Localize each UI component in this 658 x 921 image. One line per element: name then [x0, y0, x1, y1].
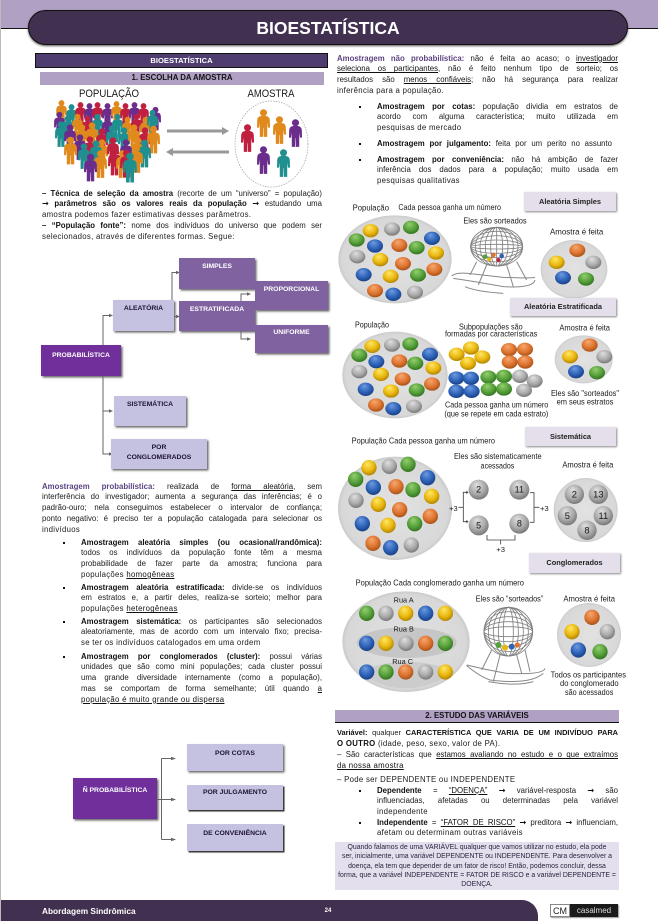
- bullet: aleatória simples: probabilidade de fazer parte da amostra; funciona para: [81, 559, 322, 568]
- logo: casalmed: casalmed: [577, 906, 611, 915]
- panel: sistemática: Amostra é feita: [562, 460, 614, 470]
- box: probabilística: [41, 345, 121, 376]
- panel: aleatória estratificada: Subpopulações são: [459, 321, 523, 331]
- text block: técnica de seleção: → parâmetros são os valores reais da população → estudando uma: [42, 199, 322, 208]
- box: por julgamento: [187, 785, 283, 810]
- callout: variável dependente e independente: Quando falamos de uma VARIÁVEL qualquer que vamos utilizar no estudo, ela pode: [348, 844, 606, 851]
- bullet: aleatória estratificada: Amostragem aleatória estratificada: divide-se os indivíduos: [81, 583, 322, 592]
- box: uniforme: UNIFORME: [273, 329, 310, 336]
- text block: técnica de seleção: – “População fonte”: nome dos indivíduos do universo que podem ser: [42, 221, 322, 230]
- bullet: sistemática: se ter os indivíduos catalogados em uma ordem: [81, 638, 260, 647]
- panel: aleatória simples: População: [353, 202, 389, 212]
- bullet: dependente: Dependente = “DOENÇA” → variável-resposta → são: [377, 786, 618, 795]
- connector arrows: [102, 270, 251, 456]
- section heading: bioestatística: [35, 53, 328, 68]
- bullet: aleatória estratificada: populações heterogêneas: [81, 604, 178, 613]
- text block: amostragem probabilística: interferência do investigador; aumenta a segurança das inferências; é o: [42, 492, 322, 501]
- tag: conglomerados: Conglomerados: [546, 558, 603, 567]
- panel: sistemática: 5: [476, 520, 481, 530]
- panel: sistemática: +3: [449, 504, 458, 513]
- text block: amostragem não probabilística: inferência para a população.: [337, 86, 444, 95]
- header band: [1, 0, 658, 29]
- bullet: por conveniência: Amostragem por conveniência: não há ambição de fazer: [377, 155, 618, 164]
- bullet: por cotas: Amostragem por cotas: população dividia em estratos de: [377, 102, 618, 111]
- bullet: independente: [377, 818, 618, 839]
- connector arrows: [157, 756, 176, 842]
- text block: amostragem probabilística: ponto negativo: é preciso ter a população catalogada para selecionar os: [42, 514, 322, 523]
- illustration: população e amostra: AMOSTRA: [248, 88, 295, 100]
- box: estratificada: ESTRATIFICADA: [190, 306, 244, 313]
- callout: variável dependente e independente: forma, que a variável INDEPENDENTE = FATOR DE RISCO e a variável DEPENDENTE =: [338, 872, 616, 879]
- bullet: por cotas: pesquisas de mercado: [377, 123, 461, 132]
- panel: sistemática: 11: [598, 511, 608, 521]
- bullet: independente: afetam ou determinam outras variáveis: [377, 828, 523, 837]
- bullet: conglomerados: mas se comportam de forma semelhante; útil quando a: [81, 684, 322, 693]
- panel: aleatória estratificada: [342, 320, 619, 419]
- page left edge: [0, 0, 1, 921]
- text block: variável: O OUTRO (idade, peso, sexo, valor de PA).: [337, 739, 500, 748]
- text block: variável: da nossa amostra: [337, 761, 404, 770]
- heading: estudo das variáveis: 2. ESTUDO DAS VARIÁVEIS: [425, 711, 529, 720]
- bullet: aleatória estratificada: [81, 583, 322, 615]
- tag: sistemática: Sistemática: [550, 432, 591, 441]
- bullet: independente: Independente = “FATOR DE RISCO” → preditora → influenciam,: [377, 818, 618, 827]
- heading: estudo das variáveis: [335, 710, 619, 723]
- bullet: dependente: influenciadas, afetadas ou determinadas pela variável: [377, 796, 618, 805]
- flowchart: amostragem probabilística: [41, 258, 331, 472]
- text block: amostragem não probabilística: Amostragem não probabilística: não é feita ao acaso; o investigador: [337, 54, 618, 63]
- panel: sistemática: 2: [572, 490, 577, 500]
- bullet: aleatória simples: todos os indivíduos da população fonte têm a mesma: [81, 548, 322, 557]
- panel: aleatória simples: Amostra é feita: [550, 226, 604, 236]
- box: por cotas: POR COTAS: [215, 750, 255, 757]
- illustration: população e amostra: POPULAÇÃO: [79, 87, 139, 100]
- bullet: aleatória simples: populações homogêneas: [81, 570, 174, 579]
- panel: aleatória simples: [338, 202, 607, 303]
- bullet: por conveniência: pesquisas qualitativas: [377, 176, 460, 185]
- box: simples: SIMPLES: [202, 263, 232, 270]
- bullet: conglomerados: população é muito grande ou dispersa: [81, 695, 224, 704]
- tag: sistemática: [525, 427, 616, 446]
- text block: variável: – São características que estamos avaliando no estudo e o que extraímos: [337, 750, 618, 759]
- bullet: por conveniência: inferência dos dados para a população; muito usada em: [377, 165, 618, 174]
- text block: amostragem probabilística: [42, 482, 322, 534]
- panel: sistemática: [338, 435, 618, 560]
- panel: sistemática: População Cada pessoa ganha um número: [352, 435, 495, 445]
- box: por conglomerados: POR: [152, 444, 166, 451]
- box: aleatória: [113, 300, 174, 331]
- bullet: sistemática: aleatoriamente, mas de acordo com um intervalo fixo; precisa-: [81, 627, 322, 636]
- bullet: por julgamento: Amostragem por julgamento: feita por um perito no assunto: [377, 139, 612, 148]
- panel: sistemática: 5: [565, 511, 570, 521]
- heading: escolha da amostra: 1. ESCOLHA DA AMOSTRA: [132, 73, 232, 82]
- text block: técnica de seleção: amostra podemos fazer estimativas desses parâmetros.: [42, 210, 251, 219]
- heading: escolha da amostra: [40, 72, 324, 85]
- box: não probabilística: Ñ PROBABILÍSTICA: [83, 787, 147, 794]
- panel: conglomerados: Eles são “sorteados”: [476, 594, 544, 604]
- text block: amostragem probabilística: indivíduos: [42, 525, 80, 534]
- box: por conglomerados: [111, 439, 207, 469]
- panel: conglomerados: População Cada conglomerado ganha um número: [356, 577, 524, 587]
- box: sistemática: [114, 396, 186, 426]
- box: probabilística: PROBABILÍSTICA: [52, 352, 110, 359]
- box: estratificada: [179, 301, 255, 331]
- panel: aleatória simples: Eles são sorteados: [463, 216, 527, 226]
- callout: variável dependente e independente: [335, 842, 619, 890]
- text block: amostragem não probabilística: seleciona os participantes, não é feito nenhum tipo de sorteio; os: [337, 64, 618, 73]
- panel: conglomerados: Rua A: [394, 596, 414, 605]
- panel: conglomerados: [342, 577, 626, 697]
- bullet: por cotas: [377, 102, 618, 134]
- tag: conglomerados: [529, 553, 620, 573]
- panel: conglomerados: Rua B: [393, 625, 414, 634]
- box: proporcional: [255, 281, 328, 310]
- bullet: sistemática: [81, 617, 322, 649]
- panel: sistemática: 8: [517, 519, 522, 529]
- tag: aleatória simples: [524, 192, 616, 211]
- footer bar: [1, 900, 538, 921]
- box: uniforme: [255, 325, 328, 353]
- panel: aleatória estratificada: formadas por características: [445, 329, 537, 339]
- panel: aleatória estratificada: Eles são "sorteados": [551, 388, 619, 398]
- logo: casalmed: [550, 904, 618, 917]
- bullet: aleatória estratificada: em estratos e, a partir deles, realiza-se sorteio; melhor para: [81, 593, 322, 602]
- panel: conglomerados: Todos os participantes: [551, 669, 626, 679]
- text block: amostragem não probabilística: [337, 54, 618, 95]
- box: por julgamento: POR JULGAMENTO: [203, 789, 267, 796]
- box: sistemática: SISTEMÁTICA: [127, 401, 173, 408]
- flowchart: amostragem não probabilística: [73, 744, 286, 854]
- bullet: por cotas: acordo com alguma característica; muito utilizada em: [377, 112, 618, 121]
- panel: aleatória estratificada: Amostra é feita: [559, 322, 610, 332]
- box: de conveniência: [187, 824, 283, 851]
- text block: variável: [337, 728, 618, 770]
- panel: sistemática: 8: [584, 526, 590, 536]
- text block: variável: Variável: qualquer CARACTERÍSTICA QUE VARIA DE UM INDIVÍDUO PARA: [337, 728, 618, 737]
- panel: sistemática: 13: [593, 490, 604, 500]
- panel: conglomerados: são acessados: [565, 687, 613, 697]
- bullet: conglomerados: [81, 652, 322, 706]
- bullet: conglomerados: Amostragem por conglomerados (cluster): possui várias: [81, 652, 322, 661]
- box: por conglomerados: CONGLOMERADOS: [127, 454, 191, 461]
- panel: sistemática: Eles são sistematicamente: [454, 451, 542, 461]
- box: de conveniência: DE CONVENIÊNCIA: [203, 830, 267, 837]
- tag: aleatória simples: Aleatória Simples: [539, 197, 601, 206]
- panel: aleatória simples: Cada pessoa ganha um número: [398, 202, 501, 212]
- logo: casalmed: CM: [553, 906, 567, 916]
- box: simples: [179, 258, 255, 289]
- bullet: sistemática: Amostragem sistemática: os participantes são selecionados: [81, 617, 322, 626]
- footer: page number: 24: [325, 908, 331, 914]
- callout: variável dependente e independente: DOENÇA.: [461, 881, 493, 888]
- tag: aleatória estratificada: [510, 298, 616, 316]
- bullet: conglomerados: uma grande diversidade internamente (como a população),: [81, 673, 322, 682]
- bullet: por conveniência: [377, 155, 618, 187]
- text: dependente ou independente: – Pode ser DEPENDENTE ou INDEPENDENTE: [337, 775, 515, 784]
- panel: conglomerados: Amostra é feita: [563, 594, 615, 604]
- bullet: conglomerados: unidades que são como mini populações; cada cluster possui: [81, 662, 322, 671]
- panel: aleatória estratificada: em seus estratos: [557, 396, 613, 406]
- panel: sistemática: 11: [515, 485, 524, 495]
- bullet: aleatória simples: Amostragem aleatória simples (ou ocasional/randômica):: [81, 538, 322, 547]
- text block: técnica de seleção: [42, 189, 322, 241]
- footer: abordagem sindrômica: Abordagem Sindrômica: [42, 906, 136, 916]
- panel: aleatória estratificada: (que se repete em cada estrato): [444, 409, 549, 419]
- text block: técnica de seleção: – Técnica de seleção da amostra (recorte de um “universo” = população): [42, 189, 322, 198]
- panel: conglomerados: Rua C: [392, 657, 414, 666]
- panel: sistemática: +3: [496, 545, 505, 554]
- panel: sistemática: acessados: [481, 460, 514, 470]
- panel: sistemática: +3: [540, 504, 549, 513]
- callout: variável dependente e independente: doença, ela tem que depender de um fator de risco! Então, podemos concluir, dessa: [348, 863, 606, 870]
- box: por cotas: [187, 744, 283, 771]
- bullet: aleatória simples: [81, 538, 322, 581]
- callout: variável dependente e independente: ser, inicialmente, uma variável DEPENDENTE ou INDEPENDENTE. Para desenvolver a: [342, 853, 612, 860]
- panel: sistemática: 2: [476, 485, 481, 495]
- title: [28, 10, 628, 45]
- bullet: dependente: independente: [377, 807, 428, 816]
- tag: aleatória estratificada: Aleatória Estratificada: [524, 302, 602, 311]
- panel: conglomerados: do conglomerado: [560, 678, 619, 688]
- text block: técnica de seleção: selecionados, através de diferentes formas. Segue:: [42, 232, 235, 241]
- section heading: bioestatística: BIOESTATÍSTICA: [150, 56, 213, 65]
- box: proporcional: PROPORCIONAL: [264, 286, 319, 293]
- box: não probabilística: [73, 778, 157, 819]
- title: BIOESTATÍSTICA: [256, 18, 400, 38]
- text block: amostragem probabilística: padrão-ouro; nela conseguimos estabelecer o intervalor de confiança;: [42, 503, 322, 512]
- panel: aleatória estratificada: População: [355, 320, 389, 330]
- box: aleatória: ALEATÓRIA: [124, 305, 163, 312]
- bullet: dependente: [377, 786, 618, 818]
- panel: aleatória estratificada: Cada pessoa ganha um número: [445, 400, 549, 410]
- text block: amostragem não probabilística: resultados são menos confiáveis; não há segurança para realizar: [337, 75, 618, 84]
- text block: amostragem probabilística: Amostragem probabilística: realizada de forma aleatória, sem: [42, 482, 322, 491]
